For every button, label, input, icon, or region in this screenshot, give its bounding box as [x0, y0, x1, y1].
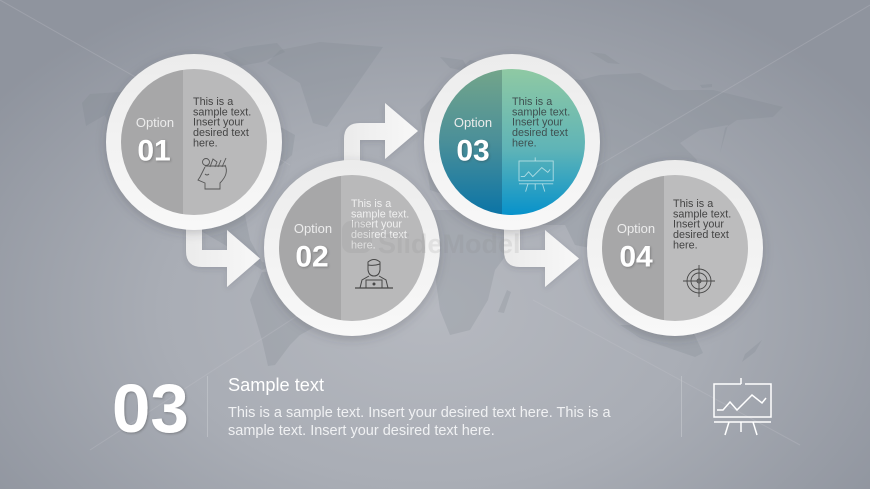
text: option 02 description: This is a [351, 198, 391, 210]
circle: option 03 [424, 54, 600, 230]
circle: option 02: Option [294, 221, 332, 236]
text: option 01 description: desired text [193, 127, 249, 139]
arrow: 01 to 02 [186, 225, 260, 287]
text: option 01 description: here. [193, 138, 218, 150]
icon: target [683, 265, 715, 297]
icon: head with ideas [198, 158, 226, 189]
text: option 04 description: This is a [673, 198, 713, 210]
circle: option 02 [264, 160, 440, 336]
text block: description: sample text. Insert your desired text here. [228, 423, 495, 439]
text: option 04 description: Insert your [673, 219, 724, 231]
arrow: 03 to 04 [504, 225, 579, 287]
big number: 03 [112, 370, 189, 447]
circle: option 03: 03 [456, 134, 490, 168]
text: option 03 description: This is a [512, 96, 552, 108]
text: option 02 description: desired text [351, 229, 407, 241]
circle: option 02: 02 [295, 240, 329, 274]
arrow: 02 to 03 [344, 103, 418, 170]
watermark: SlideModel [378, 229, 521, 259]
text: option 01 description: This is a [193, 96, 233, 108]
circle: option 03: Option [454, 115, 492, 130]
divider right [680, 376, 682, 437]
text: option 02 description: here. [351, 240, 376, 252]
text: option 04 description: sample text. [673, 208, 731, 220]
circle: option 01: 01 [137, 134, 171, 168]
watermark [342, 221, 521, 259]
text: option 03 description: sample text. [512, 106, 570, 118]
icon: person at laptop [355, 260, 393, 288]
text: option 02 description: sample text. [351, 208, 409, 220]
world map [82, 42, 783, 366]
divider left [206, 376, 208, 437]
text: option 01 description: Insert your [193, 117, 244, 129]
text: option 03 description: desired text [512, 127, 568, 139]
heading: sample text: Sample text [228, 375, 324, 395]
text block: description: This is a sample text. Insert your desired text here. This is a [228, 405, 611, 421]
text: option 03 description: Insert your [512, 117, 563, 129]
circle: option 04 [587, 160, 763, 336]
text: option 04 description: desired text [673, 229, 729, 241]
circle: option 04: 04 [619, 240, 653, 274]
circle: option 04: Option [617, 221, 655, 236]
icon: presentation board small [519, 157, 553, 192]
circle: option 01 [106, 54, 282, 230]
text: option 01 description: sample text. [193, 106, 251, 118]
text: option 03 description: here. [512, 138, 537, 150]
circle: option 01: Option [136, 115, 174, 130]
text: option 04 description: here. [673, 240, 698, 252]
icon: presentation board [714, 378, 771, 435]
text: option 02 description: Insert your [351, 219, 402, 231]
